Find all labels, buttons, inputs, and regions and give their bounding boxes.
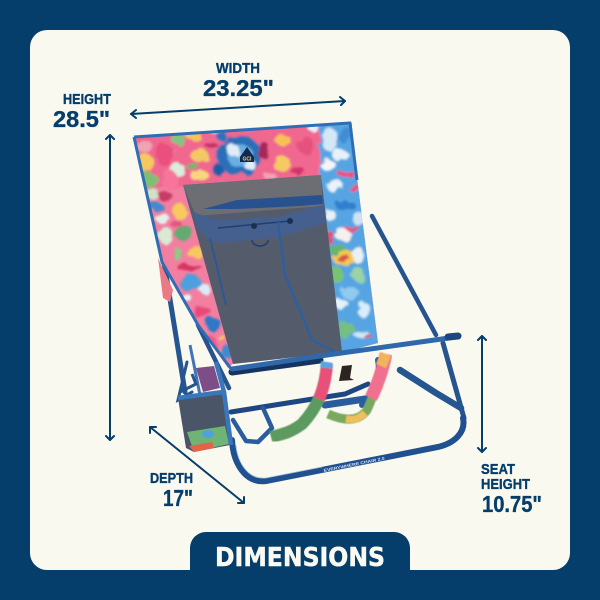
- rear fabric flap: [158, 258, 173, 302]
- arrow: depth: [150, 427, 244, 503]
- label: height: 28.5": [53, 106, 110, 132]
- label: width: [203, 60, 274, 101]
- model name on runner: EVERYWHERE CHAIR 2.0: [323, 456, 386, 473]
- bottom runner tube: [232, 418, 463, 481]
- logo: GCI: [243, 156, 252, 162]
- left column: [136, 140, 152, 152]
- label: seat height: SEAT: [481, 461, 515, 478]
- title tab: [190, 532, 410, 573]
- label: width: WIDTH: [216, 60, 260, 77]
- arrow: width: [131, 97, 345, 118]
- chair back fabric: [128, 115, 384, 370]
- chair illustration: [128, 115, 464, 481]
- top band: [136, 126, 323, 188]
- arrow: seat height: [478, 336, 486, 452]
- label: width: 23.25": [203, 75, 274, 101]
- label: depth: [150, 470, 193, 511]
- mesh seat: [183, 175, 342, 364]
- buckle: [339, 365, 354, 381]
- label: depth: 17": [163, 485, 193, 511]
- seat front bar: [232, 336, 458, 372]
- cup holder pocket: [178, 345, 231, 452]
- label: seat height: 10.75": [482, 491, 542, 517]
- logo: [240, 147, 254, 162]
- label: height: [53, 91, 111, 132]
- label: seat height: [481, 461, 542, 517]
- title tab: DIMENSIONS: [215, 543, 385, 573]
- hanging straps: [271, 354, 386, 437]
- lower frame: [231, 343, 464, 442]
- label: height: HEIGHT: [63, 91, 111, 108]
- right panel blue: [316, 124, 378, 350]
- label: depth: DEPTH: [150, 470, 193, 487]
- rear frame legs: [164, 123, 436, 400]
- arrow: height: [106, 135, 114, 440]
- fabric binding: [134, 123, 357, 370]
- label: seat height: HEIGHT: [481, 476, 530, 493]
